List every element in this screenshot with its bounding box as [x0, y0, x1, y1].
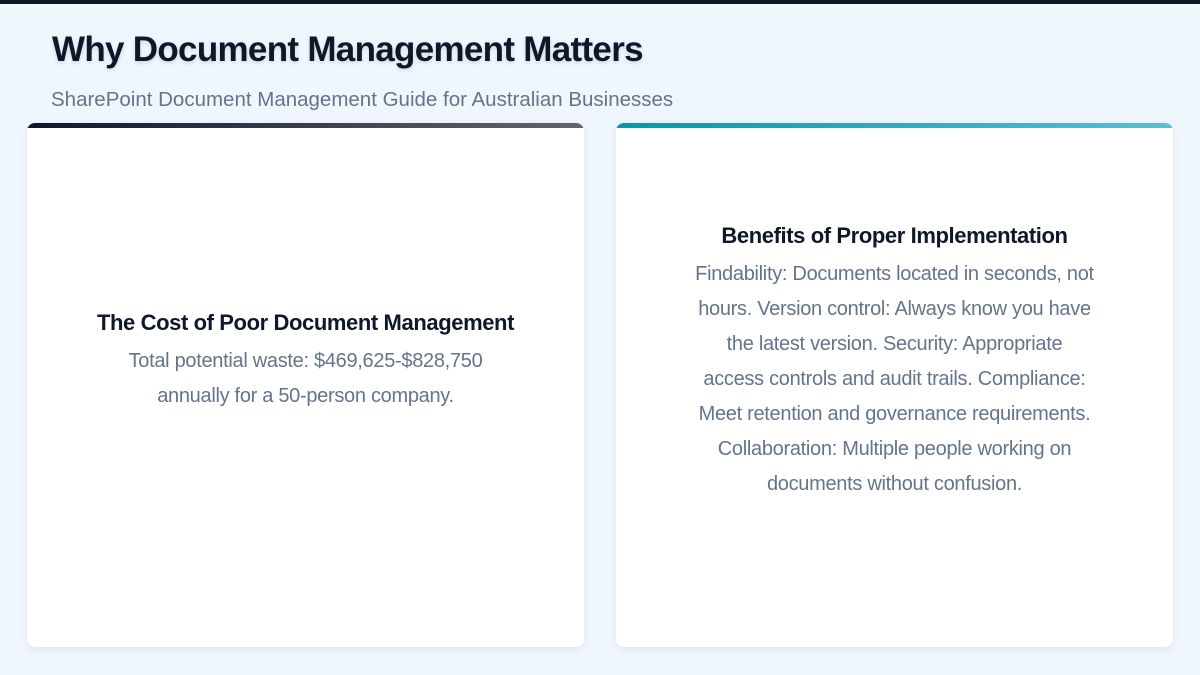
text: cost: Total potential waste: $469,625-$828,750	[129, 350, 482, 372]
title: Why Document Management Matters	[52, 30, 643, 69]
text: benefits: the latest version. Security: Appropriate	[727, 332, 1062, 354]
text: cost	[129, 350, 482, 407]
panel: cost	[27, 123, 584, 647]
text: benefits	[695, 262, 1094, 494]
heading: benefits: Benefits of Proper Implementation	[721, 222, 1068, 248]
text: benefits: access controls and audit trails. Compliance:	[703, 368, 1086, 390]
text: benefits: Findability: Documents located in seconds, not	[695, 262, 1094, 284]
text: benefits: hours. Version control: Always know you have	[698, 298, 1091, 320]
subtitle: SharePoint Document Management Guide for Australian Businesses	[51, 88, 673, 111]
text: benefits: Meet retention and governance requirements.	[699, 402, 1090, 424]
heading: cost: The Cost of Poor Document Management	[97, 310, 514, 335]
text: cost: annually for a 50-person company.	[157, 385, 454, 407]
text: benefits: documents without confusion.	[767, 472, 1022, 494]
text: benefits: Collaboration: Multiple people working on	[718, 438, 1071, 460]
panel: benefits	[616, 123, 1173, 647]
